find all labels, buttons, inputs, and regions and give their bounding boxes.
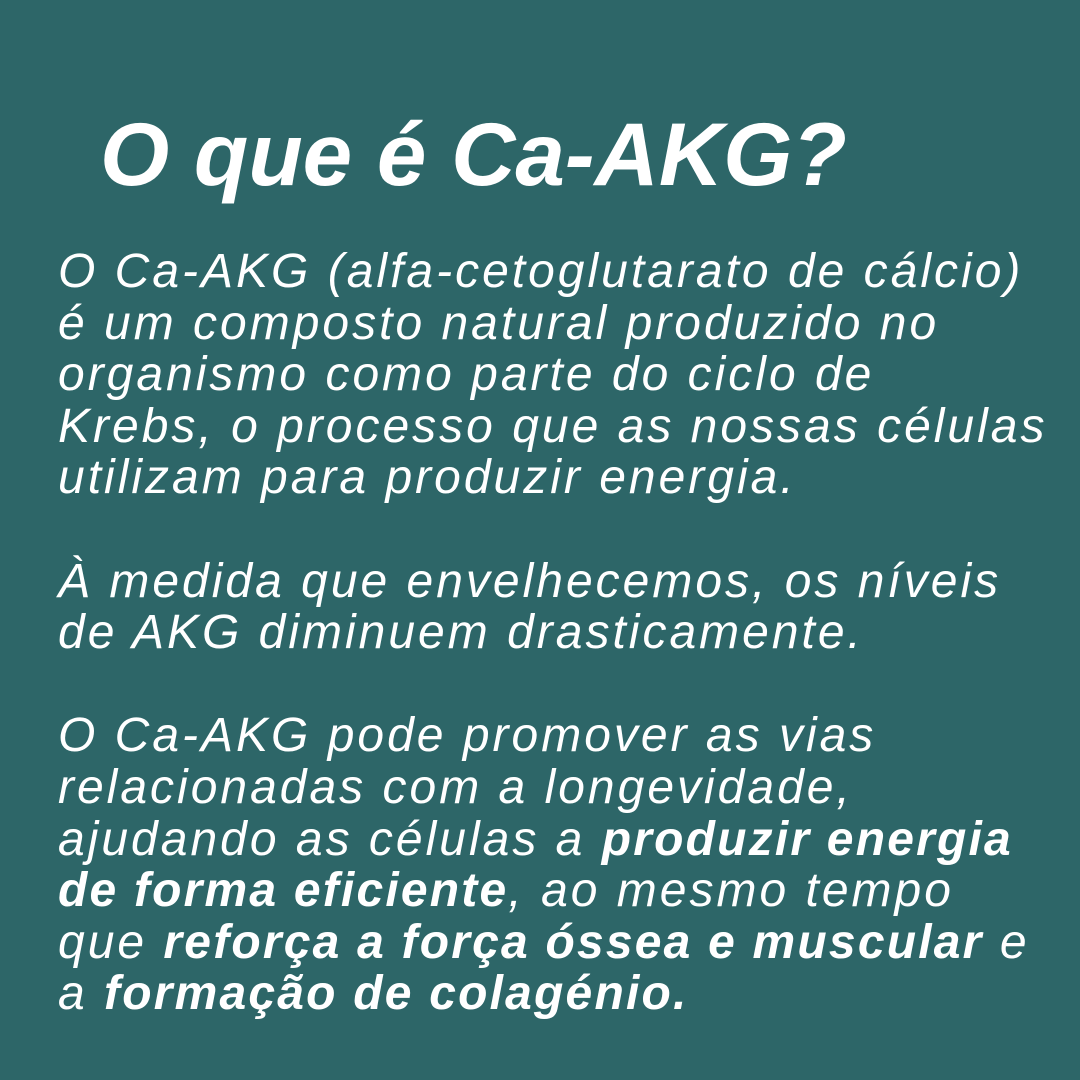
text block: description bbox=[56, 245, 1047, 1020]
text block: description: de AKG diminuem drasticamente. bbox=[58, 606, 864, 659]
text block: description: relacionadas com a longevidade, bbox=[58, 761, 853, 814]
text block: description: utilizam para produzir energia. bbox=[58, 451, 797, 504]
title: O que é Ca-AKG? bbox=[100, 104, 847, 204]
text block: description: é um composto natural produzido no bbox=[58, 297, 939, 350]
text block: description: À medida que envelhecemos, os níveis bbox=[58, 555, 1001, 608]
text block: description: Krebs, o processo que as nossas células bbox=[58, 400, 1047, 453]
text block: description: que reforça a força óssea e muscular e bbox=[58, 916, 1030, 969]
text block: description: de forma eficiente, ao mesmo tempo bbox=[58, 864, 954, 917]
text block: description: ajudando as células a produzir energia bbox=[58, 813, 1013, 866]
text block: description: a formação de colagénio. bbox=[58, 967, 689, 1020]
text block: description: organismo como parte do ciclo de bbox=[58, 348, 874, 401]
text block: description: O Ca-AKG pode promover as vias bbox=[58, 709, 876, 762]
text block: description: O Ca-AKG (alfa-cetoglutarato de cálcio) bbox=[58, 245, 1023, 298]
